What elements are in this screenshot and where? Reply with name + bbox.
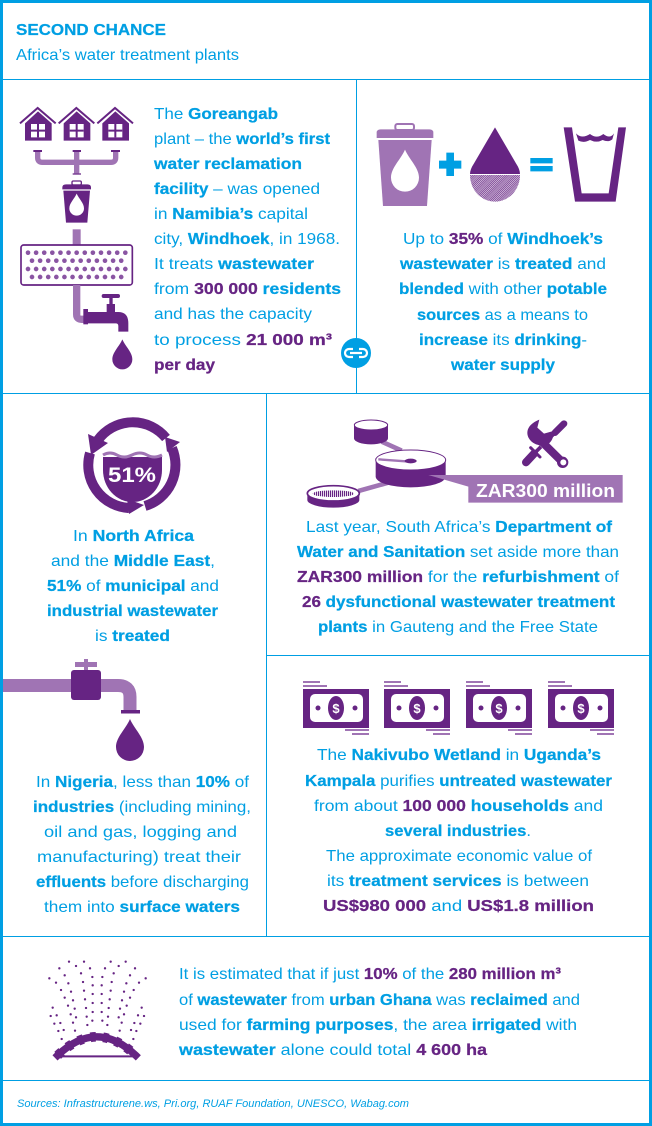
text: Ghana: used for farming purposes , the area irrigated with <box>179 1017 577 1034</box>
icon: glass of water <box>564 127 626 202</box>
text: Windhoek blending <box>399 231 607 374</box>
text: Nakivubo Wetland: several industries . <box>385 823 531 840</box>
icon: equals <box>530 158 553 171</box>
banknote 3: $ <box>495 701 503 716</box>
icon: collecting pipes <box>33 150 120 175</box>
banknote 2 <box>384 682 450 734</box>
text: Nakivubo Wetland: The approximate economic value of <box>326 848 593 865</box>
icon: wrench and screwdriver <box>526 420 568 468</box>
text: Nigeria <box>33 774 251 916</box>
icon: 51% recycling ring: 51% <box>108 464 156 487</box>
text: Goreangab plant: and has the capacity <box>154 306 312 323</box>
text: Nigeria: industries (including mining, <box>33 799 251 816</box>
text: South Africa refurbishment: ZAR300 million for the refurbishment of <box>297 569 620 586</box>
text: Ghana: of wastewater from urban Ghana was reclaimed and <box>179 992 580 1009</box>
text: Nakivubo Wetland: US$980 000 and US$1.8 million <box>323 898 594 915</box>
icon: half hatched drop <box>470 127 520 202</box>
water droplets <box>49 962 146 1039</box>
title: Africa’s water treatment plants <box>16 47 239 64</box>
text: Goreangab plant: water reclamation <box>153 156 302 173</box>
text: Ghana: It is estimated that if just 10% of the 280 million m³ <box>179 966 561 983</box>
text: Goreangab plant: in Namibia’s capital <box>154 206 308 223</box>
banner <box>428 475 623 503</box>
text: Nakivubo Wetland: from about 100 000 households and <box>314 798 603 815</box>
text: Goreangab plant: It treats wastewater <box>154 256 314 273</box>
text: Ghana: wastewater alone could total 4 600 ha <box>178 1042 487 1059</box>
title <box>16 22 239 64</box>
text: North Africa: 51% of municipal and <box>47 578 219 595</box>
icon: waste bin <box>62 181 91 223</box>
text: Goreangab plant: from 300 000 residents <box>154 281 341 298</box>
text: Goreangab plant: facility – was opened <box>154 181 320 198</box>
icon: link badge <box>341 338 371 368</box>
text: Windhoek blending: sources as a means to <box>417 307 588 324</box>
banknote 4 <box>548 682 614 734</box>
filter tank <box>307 486 359 508</box>
text: Ghana <box>178 966 580 1059</box>
text: Nakivubo Wetland: The Nakivubo Wetland in Uganda’s <box>317 747 601 764</box>
text: Windhoek blending: increase its drinking- <box>419 332 587 349</box>
text: North Africa <box>47 528 219 645</box>
banknote 1: $ <box>332 701 340 716</box>
text: Goreangab plant <box>153 106 341 374</box>
text: North Africa: is treated <box>95 628 170 645</box>
banknote 4: $ <box>577 701 585 716</box>
main tank <box>376 450 446 487</box>
text: Nakivubo Wetland: Kampala purifies untreated wastewater <box>305 773 612 790</box>
icon: tap with drop <box>77 285 132 369</box>
text: North Africa: and the Middle East , <box>51 553 215 570</box>
small tank <box>354 420 388 444</box>
icon: waste bin <box>377 124 433 206</box>
icon: four banknotes <box>303 682 614 734</box>
icon: irrigation sprinkler <box>49 962 146 1056</box>
text: Windhoek blending: water supply <box>450 357 555 374</box>
icon: pipe with valve and drop <box>3 659 144 761</box>
banknote 3 <box>466 682 532 734</box>
banner label: ZAR300 million <box>476 481 615 501</box>
text: South Africa refurbishment: Last year, South Africa’s Department of <box>306 519 613 536</box>
icon: plus <box>439 153 461 176</box>
connecting pipes <box>358 442 402 491</box>
text: Nakivubo Wetland <box>305 747 612 915</box>
text: Goreangab plant: The Goreangab <box>154 106 278 123</box>
banknote 2: $ <box>413 701 421 716</box>
text: North Africa: In North Africa <box>73 528 194 545</box>
text: South Africa refurbishment: 26 dysfunctional wastewater treatment <box>302 594 616 611</box>
icon: 51% recycling ring <box>88 422 180 514</box>
icon: three houses <box>20 108 133 141</box>
icon: wastewater plus potable water equals drinking water <box>377 124 626 206</box>
sources: Sources: Infrastructurene.ws, Pri.org, RUAF Foundation, UNESCO, Wabag.com <box>17 1098 409 1110</box>
text: North Africa: industrial wastewater <box>47 603 218 620</box>
text: South Africa refurbishment <box>297 519 620 636</box>
text: South Africa refurbishment: plants in Gauteng and the Free State <box>318 619 598 636</box>
text: Windhoek blending: Up to 35% of Windhoek’s <box>403 231 603 248</box>
text: Nigeria: effluents before discharging <box>36 874 249 891</box>
text: Nakivubo Wetland: its treatment services is between <box>327 873 589 890</box>
title: SECOND CHANCE <box>16 22 166 39</box>
text: Nigeria: them into surface waters <box>44 899 240 916</box>
text: Windhoek blending: blended with other potable <box>399 281 607 298</box>
text: Goreangab plant: city, Windhoek , in 1968. <box>154 231 340 248</box>
banknote 1 <box>303 682 369 734</box>
text: Windhoek blending: wastewater is treated and <box>399 256 606 273</box>
text: Nigeria: oil and gas, logging and <box>44 824 237 841</box>
text: Goreangab plant: to process 21 000 m³ <box>154 332 332 349</box>
icon: water reclamation process diagram <box>20 108 133 369</box>
text: Nigeria: In Nigeria, less than 10% of <box>36 774 250 791</box>
icon: filter <box>21 229 132 285</box>
text: Goreangab plant: per day <box>154 357 215 374</box>
sprinkler arc <box>58 1037 136 1055</box>
text: Nigeria: manufacturing) treat their <box>37 849 242 866</box>
text: South Africa refurbishment: Water and Sanitation set aside more than <box>297 544 619 561</box>
text: Goreangab plant: plant – the world’s first <box>154 131 331 148</box>
icon: treatment tanks with ZAR300 million banner <box>307 420 623 508</box>
